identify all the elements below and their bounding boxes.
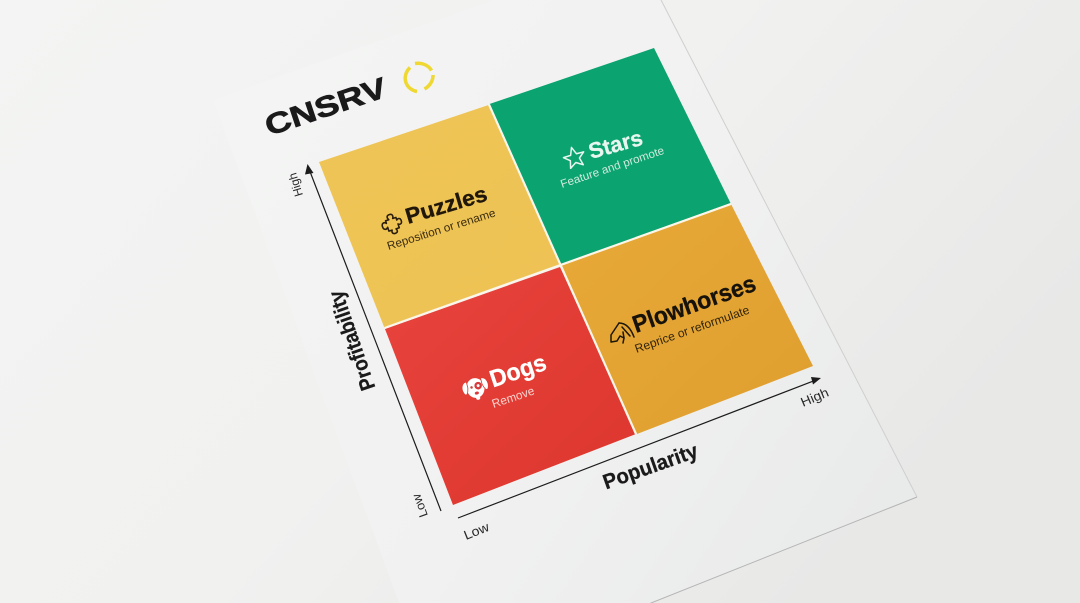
text: Feature and promote: Feature and promote [559,145,666,191]
icon: yellow ring [405,63,433,92]
label: High: High [285,171,306,198]
logo: CNSRV [261,63,433,143]
y axis: Profitability [285,164,441,519]
quadrant: Stars [490,48,730,264]
icon: dog face [460,375,491,403]
heading: Stars: Stars [586,125,645,164]
text: Reprice or reformulate: Reprice or reformulate [633,303,752,356]
x axis: Popularity [458,377,831,543]
label: Profitability: Profitability [325,287,380,393]
icon: puzzle piece [380,212,404,236]
label: Low: Low [409,491,431,519]
quadrant dividers [384,104,731,434]
label: Popularity: Popularity [600,439,701,494]
icon: star [561,145,587,169]
quadrant: Puzzles [319,105,560,328]
logo: CNSRV: CNSRV [261,72,391,143]
paper sheet [213,0,917,603]
icon: horse head [611,323,634,343]
label: High: High [798,385,831,410]
text: Reposition or rename: Reposition or rename [386,207,497,253]
arrowhead: x axis [811,377,821,384]
heading: Puzzles: Puzzles [402,181,490,229]
text: Remove: Remove [490,384,536,411]
quadrant: Plowhorses [561,204,813,434]
heading: Dogs: Dogs [486,349,550,393]
quadrant: Dogs [385,267,636,505]
arrowhead: y axis [305,164,314,174]
heading: Plowhorses: Plowhorses [629,270,760,339]
label: Low: Low [462,519,492,543]
